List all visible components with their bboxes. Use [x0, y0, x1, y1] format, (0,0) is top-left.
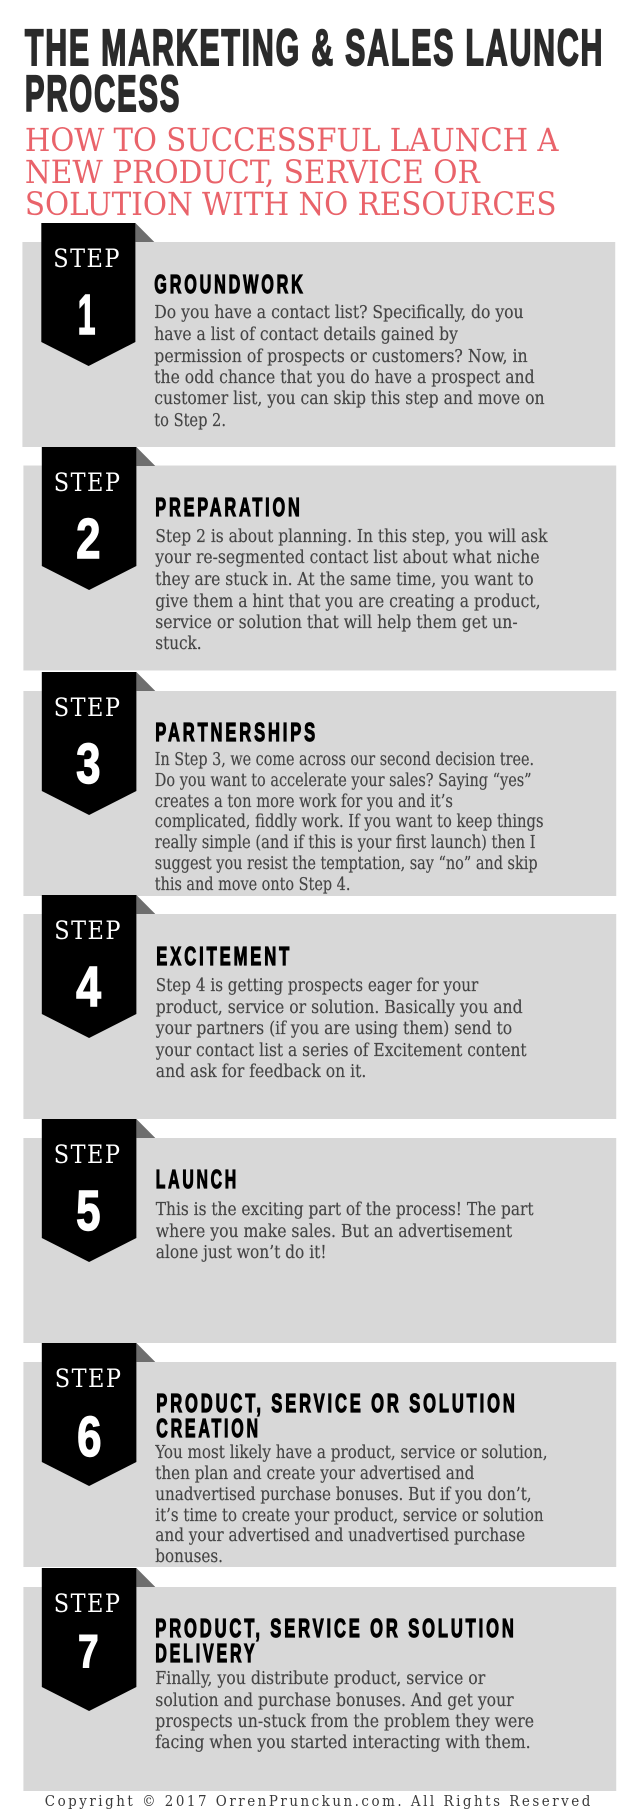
panel background: [22, 242, 615, 447]
panel background: [23, 1587, 616, 1791]
step 4 ribbon: 4: [76, 956, 101, 1019]
step 7 ribbon: 7: [78, 1625, 99, 1677]
panel background: [23, 1362, 616, 1567]
panel background: [23, 1138, 616, 1343]
body text: really simple (and if this is your first launch) then I: [155, 833, 536, 853]
panel background: [23, 691, 616, 896]
body text: then plan and create your advertised and: [155, 1464, 474, 1484]
body text: your partners (if you are using them) send to: [155, 1019, 512, 1039]
body text: unadvertised purchase bonuses. But if you don’t,: [155, 1485, 532, 1505]
step 1 ribbon: 1: [78, 284, 96, 347]
subtitle: SOLUTION WITH NO RESOURCES: [25, 185, 556, 223]
body text: In Step 3, we come across our second decision tree.: [155, 750, 534, 770]
body text: complicated, fiddly work. If you want to keep things: [155, 812, 544, 832]
body text: service or solution that will help them get un-: [155, 613, 518, 633]
heading: PREPARATION: [155, 494, 303, 522]
body text: [155, 750, 544, 895]
heading: LAUNCH: [156, 1166, 239, 1194]
step 1 ribbon: [41, 223, 154, 366]
copyright: Copyright © 2017 OrrenPrunckun.com. All Rights Reserved: [45, 1792, 591, 1810]
body text: and ask for feedback on it.: [156, 1062, 366, 1082]
step 4 ribbon: STEP: [54, 916, 122, 945]
step 7 ribbon: STEP: [54, 1589, 121, 1618]
body text: [154, 303, 545, 431]
body text: [155, 1669, 534, 1753]
step 2 ribbon: STEP: [54, 468, 121, 497]
body text: where you make sales. But an advertisement: [156, 1222, 513, 1242]
step 1 ribbon: STEP: [53, 244, 121, 273]
title: PROCESS: [25, 65, 181, 122]
panel: step 2 preparation: [23, 447, 616, 670]
body text: they are stuck in. At the same time, you want to: [155, 570, 534, 590]
panel: step 4 excitement: [23, 895, 616, 1119]
step 5 ribbon: STEP: [54, 1140, 121, 1169]
body text: bonuses.: [155, 1547, 223, 1567]
heading: EXCITEMENT: [156, 943, 292, 971]
title: [25, 19, 604, 122]
step 3 ribbon: STEP: [54, 693, 121, 722]
body text: and your advertised and unadvertised purchase: [155, 1526, 525, 1546]
body text: customer list, you can skip this step and move on: [154, 389, 545, 409]
subtitle: HOW TO SUCCESSFUL LAUNCH A: [25, 121, 560, 159]
body text: Step 4 is getting prospects eager for your: [156, 976, 479, 996]
body text: your contact list a series of Excitement content: [155, 1041, 527, 1061]
step 6 ribbon: [42, 1343, 155, 1486]
step 3 ribbon: [42, 672, 155, 815]
heading: CREATION: [156, 1415, 261, 1443]
step 2 ribbon: 2: [76, 508, 101, 571]
body text: Step 2 is about planning. In this step, you will ask: [155, 527, 548, 547]
step 6 ribbon: 6: [77, 1406, 102, 1469]
body text: facing when you started interacting with them.: [155, 1733, 531, 1753]
body text: give them a hint that you are creating a product,: [155, 592, 541, 612]
body text: to Step 2.: [154, 411, 226, 431]
subtitle: [25, 121, 560, 223]
body text: [154, 527, 548, 654]
step 6 ribbon: STEP: [55, 1364, 122, 1393]
subtitle: NEW PRODUCT, SERVICE OR: [25, 153, 481, 191]
heading: [156, 1390, 518, 1443]
step 2 ribbon: [42, 447, 155, 590]
body text: have a list of contact details gained by: [154, 325, 458, 345]
body text: it’s time to create your product, service or solution: [155, 1506, 544, 1526]
step 7 ribbon: [42, 1568, 155, 1711]
body text: This is the exciting part of the process! The part: [156, 1200, 534, 1220]
body text: creates a ton more work for you and it’s: [155, 792, 453, 812]
body text: [155, 976, 527, 1082]
step 4 ribbon: [42, 895, 155, 1038]
body text: this and move onto Step 4.: [155, 875, 350, 895]
panel: step 1 groundwork: [22, 223, 615, 447]
body text: solution and purchase bonuses. And get your: [155, 1691, 514, 1711]
body text: product, service or solution. Basically you and: [156, 998, 523, 1018]
body text: [154, 1443, 548, 1567]
panel background: [23, 466, 616, 670]
step 5 ribbon: 5: [76, 1180, 101, 1243]
panel: step 7 product, service or solution delivery: [23, 1568, 616, 1791]
heading: [155, 1615, 517, 1668]
body text: permission of prospects or customers? Now, in: [154, 347, 528, 367]
heading: DELIVERY: [155, 1640, 257, 1668]
body text: prospects un-stuck from the problem they were: [155, 1712, 534, 1732]
heading: GROUNDWORK: [154, 271, 306, 299]
panel background: [23, 914, 616, 1119]
panel: step 3 partnerships: [23, 672, 616, 896]
body text: [156, 1200, 534, 1263]
body text: Do you have a contact list? Specifically, do you: [154, 303, 524, 323]
panel: step 5 launch: [23, 1119, 616, 1343]
body text: your re-segmented contact list about what niche: [154, 548, 540, 568]
panel: step 6 product, service or solution creation: [23, 1343, 616, 1567]
step 3 ribbon: 3: [76, 733, 101, 796]
body text: alone just won’t do it!: [156, 1243, 327, 1263]
body text: Finally, you distribute product, service or: [155, 1669, 486, 1689]
heading: PARTNERSHIPS: [155, 719, 318, 747]
body text: You most likely have a product, service or solution,: [154, 1443, 548, 1463]
body text: stuck.: [155, 634, 202, 654]
body text: Do you want to accelerate your sales? Saying “yes”: [155, 771, 532, 791]
step 5 ribbon: [42, 1119, 155, 1262]
body text: the odd chance that you do have a prospect and: [154, 368, 535, 388]
body text: suggest you resist the temptation, say “no” and skip: [155, 854, 538, 874]
